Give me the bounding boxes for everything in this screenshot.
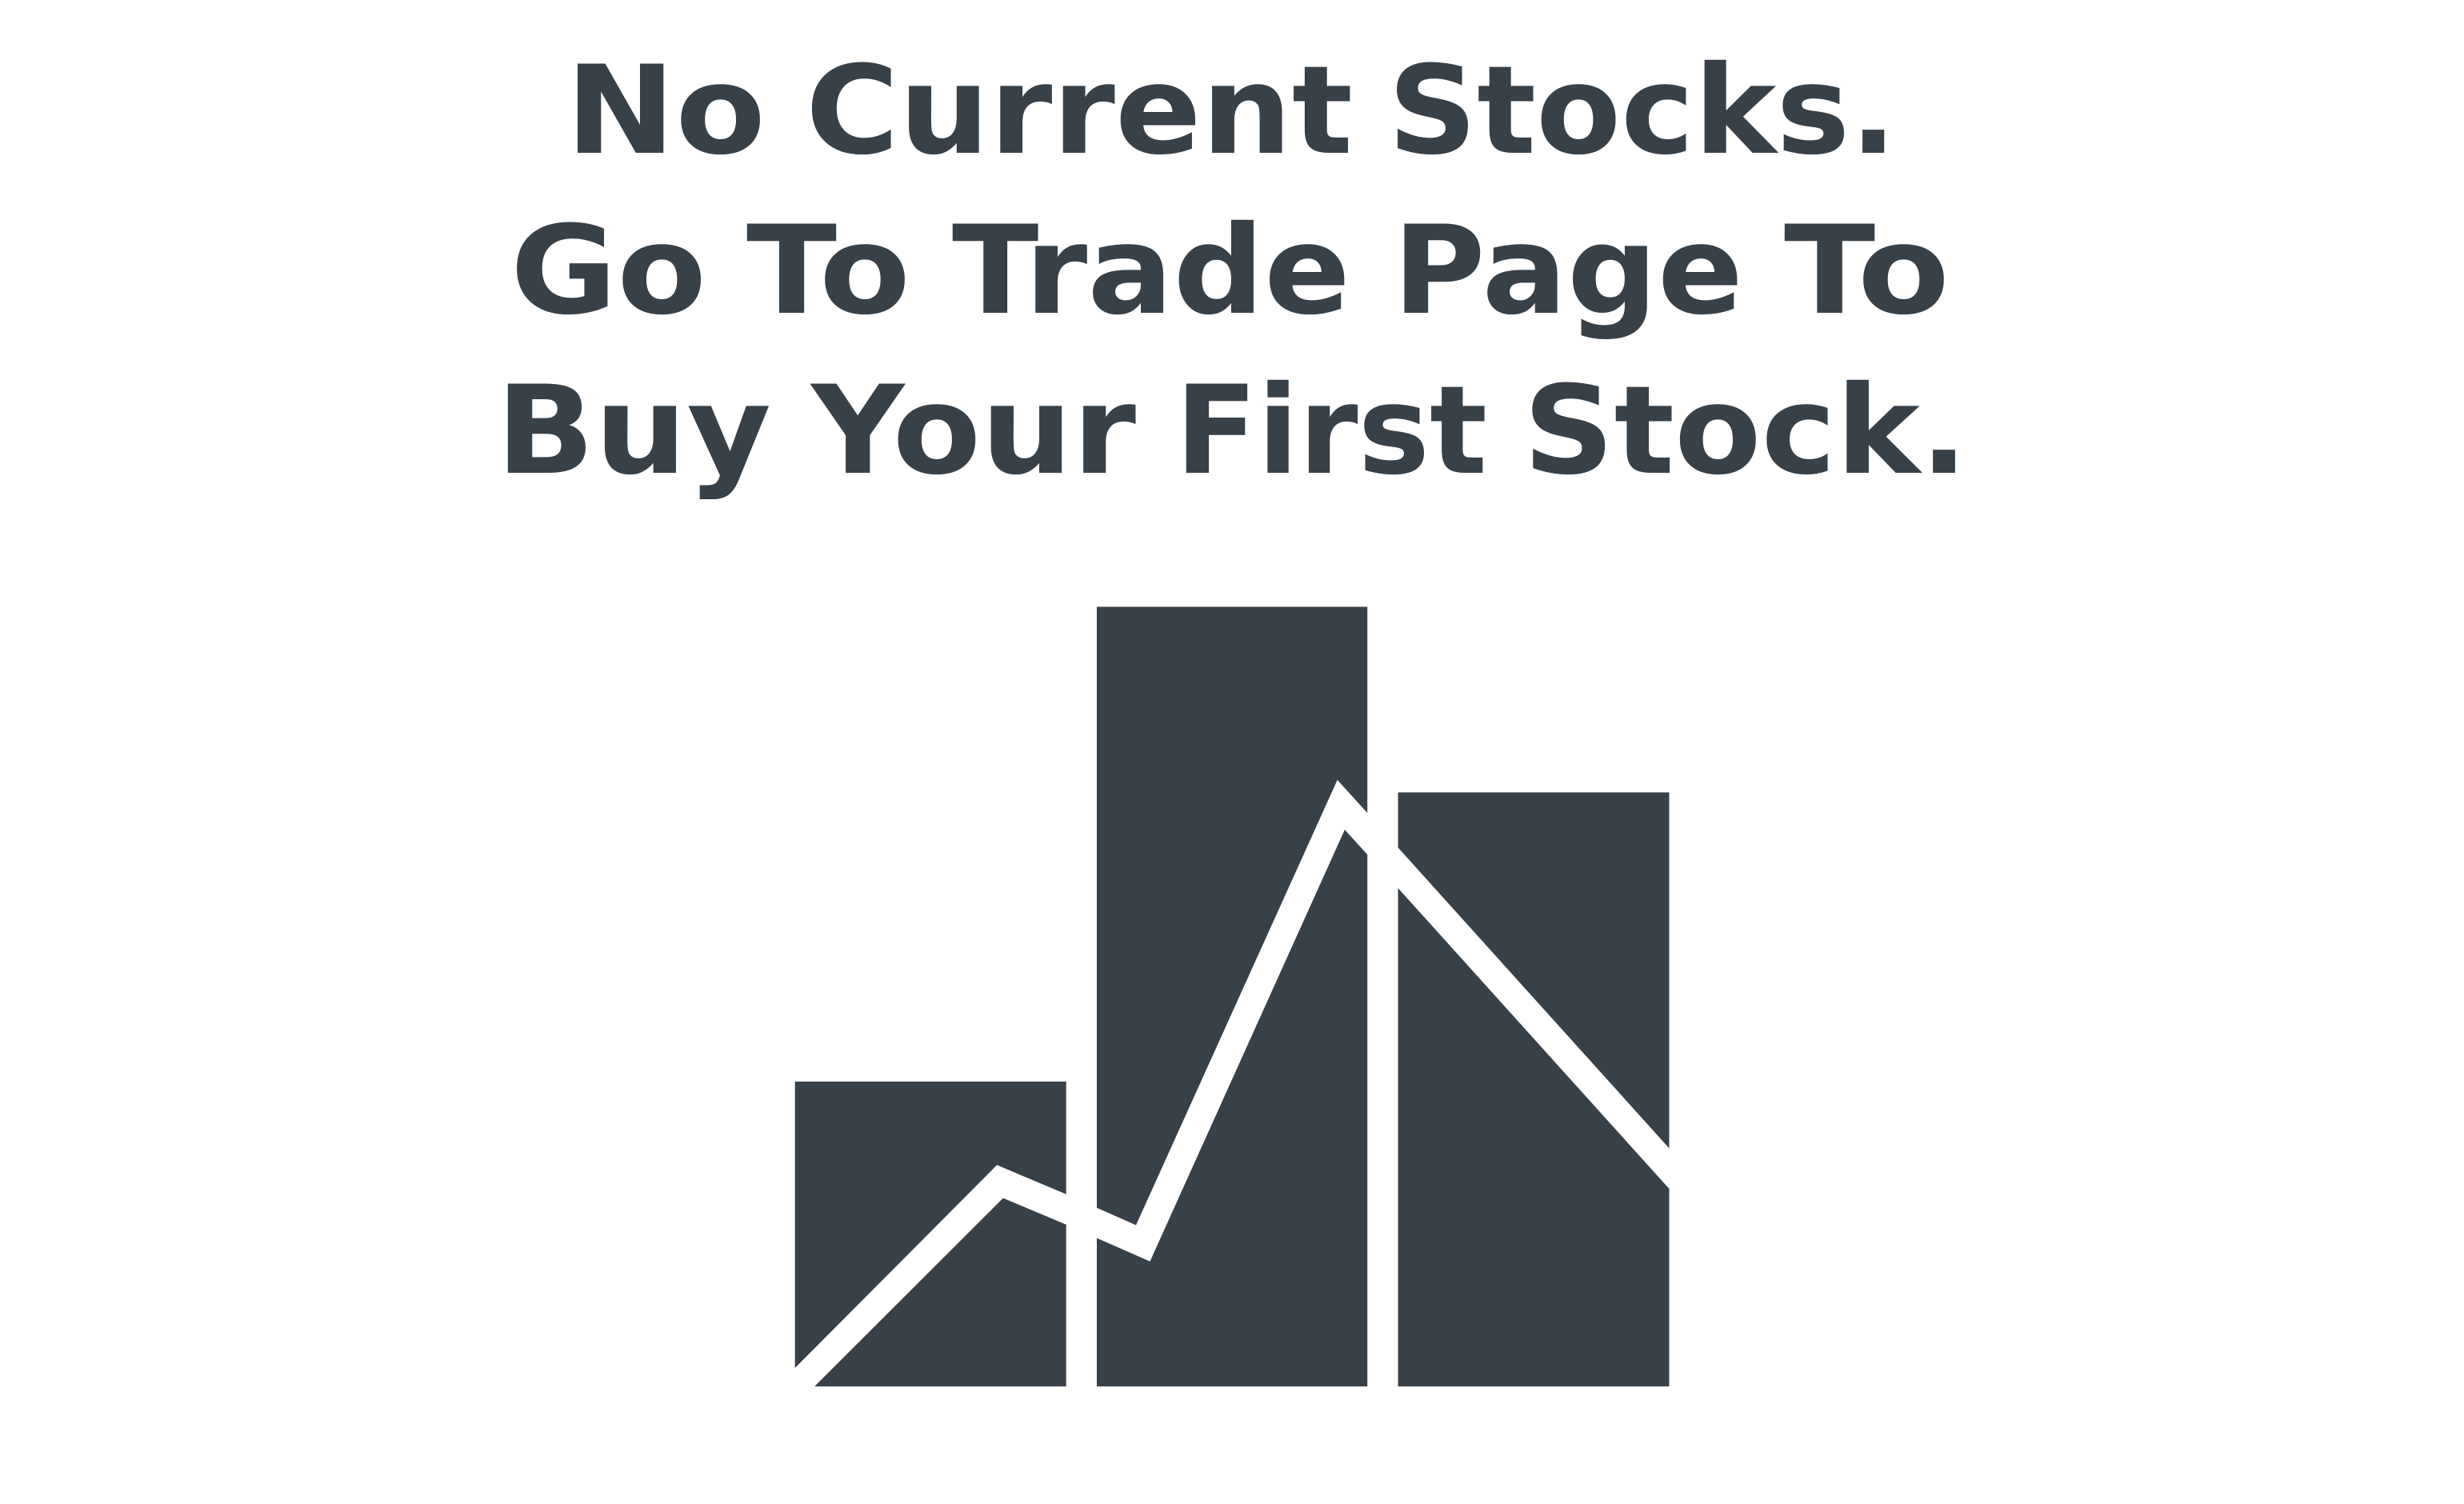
title line 2: Go xyxy=(510,200,706,342)
title line 2: To xyxy=(746,200,910,342)
title line 2: Page xyxy=(1393,200,1743,342)
title line 1: Stocks. xyxy=(1388,40,1897,182)
title line 3: Your xyxy=(810,360,1136,502)
right bar xyxy=(1398,792,1669,1386)
title line 1 xyxy=(566,40,1897,182)
title line 3: Stock. xyxy=(1523,360,1968,502)
title line 3 xyxy=(496,360,1968,502)
title line 1: No xyxy=(566,40,766,182)
left bar xyxy=(795,1082,1066,1386)
title xyxy=(496,40,1968,502)
icon: bar chart with trend line xyxy=(795,606,1670,1386)
title line 3: Buy xyxy=(496,360,771,502)
title line 3: First xyxy=(1175,360,1487,502)
middle bar xyxy=(1097,606,1367,1386)
title line 2: Trade xyxy=(952,200,1350,342)
title line 2 xyxy=(510,200,1950,342)
title line 2: To xyxy=(1784,200,1950,342)
title line 1: Current xyxy=(806,40,1353,182)
